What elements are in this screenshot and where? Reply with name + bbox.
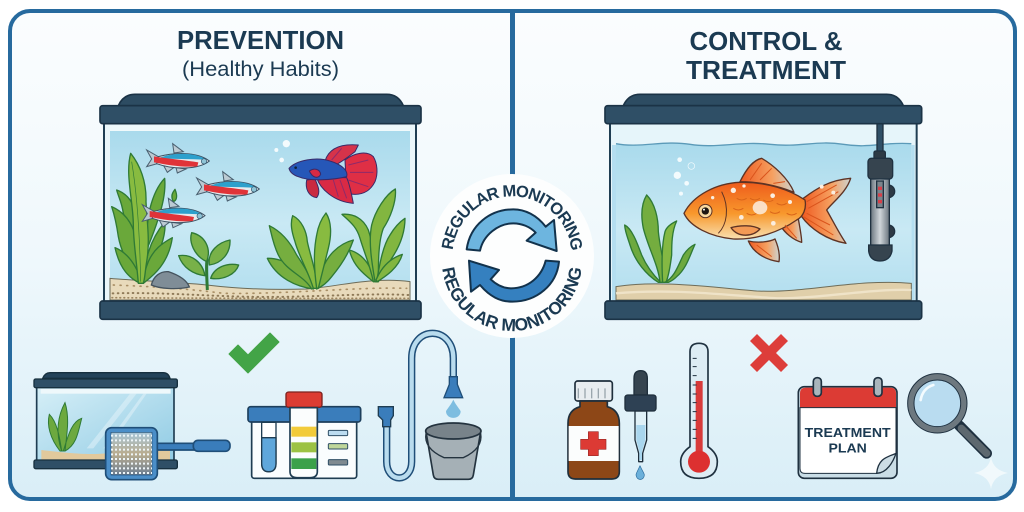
plant: wide center [267, 213, 353, 289]
goldfish [684, 158, 851, 262]
test kit [248, 392, 361, 478]
small tank and net [34, 373, 230, 480]
white spots [711, 184, 835, 226]
neon tetra fish [142, 144, 259, 228]
heater [868, 124, 895, 261]
check mark [229, 333, 279, 373]
prevention aquarium [100, 94, 421, 319]
treatment plan calendar: TREATMENT [805, 425, 891, 440]
betta fish [289, 145, 377, 203]
net [106, 428, 230, 480]
treatment plan calendar: PLAN [828, 441, 867, 456]
medicine bottle [568, 381, 619, 479]
treatment plan calendar [798, 378, 897, 478]
regular monitoring badge [430, 174, 594, 338]
regular monitoring badge: REGULAR MONITORING [442, 184, 582, 250]
title: prevention [177, 25, 344, 81]
bubbles [674, 157, 695, 196]
substrate sand [110, 278, 410, 300]
magnifying glass [908, 374, 987, 453]
plant [625, 195, 695, 282]
center divider [510, 11, 515, 499]
regular monitoring badge: REGULAR MONITORING [442, 267, 581, 332]
siphon hose and bucket [378, 333, 481, 479]
sand [616, 282, 911, 300]
sparkle [974, 457, 1008, 489]
title: control and treatment: TREATMENT [686, 55, 846, 85]
cycle arrows [467, 209, 559, 302]
plant: right [342, 189, 405, 282]
title: control and treatment [686, 26, 846, 85]
plant: small round leaves [179, 233, 239, 290]
plant: tall left [112, 153, 177, 283]
thermometer [681, 343, 717, 478]
title: control and treatment: CONTROL & [690, 26, 842, 56]
cross mark [750, 334, 788, 372]
title: prevention: PREVENTION [177, 25, 344, 55]
rock [151, 272, 189, 289]
treatment aquarium [605, 94, 922, 319]
dropper [625, 371, 656, 479]
title: prevention: (Healthy Habits) [182, 58, 339, 81]
